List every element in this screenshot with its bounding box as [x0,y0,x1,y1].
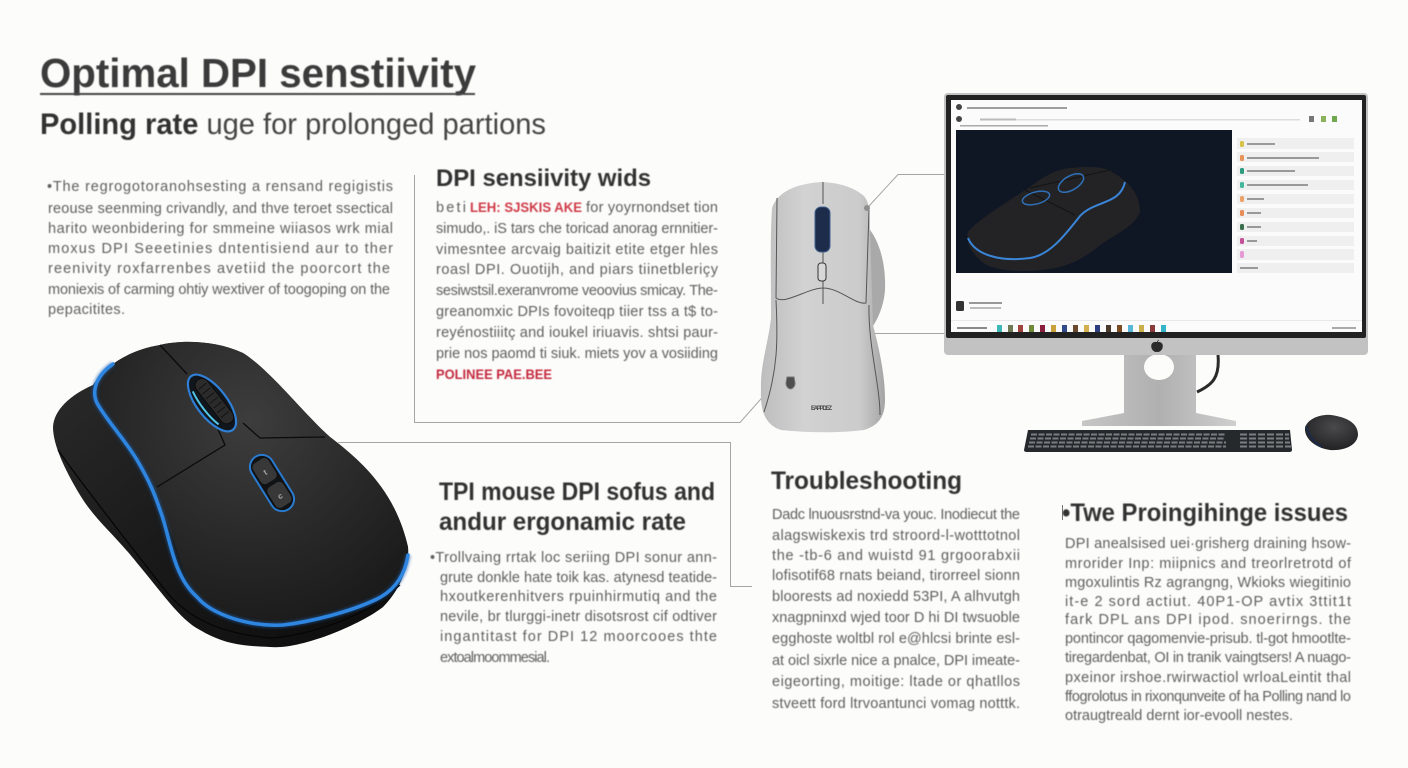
monitor frame [944,93,1368,355]
text block: DPI sensitivity: for yoyrnondset tion [586,200,718,216]
text block: troubleshooting issues: it-e 2 sord actiut. 40P1-OP avtix 3ttit1t [1065,594,1351,610]
text block: DPI sensitivity: roasl DPI. Ouotijh, and piars tiinetbleriçy [436,262,719,278]
text block: mouse DPI focus: extoalmoommesial. [440,650,550,666]
grey mouse logo [786,377,795,389]
grey mouse model label: EAPPDEZ [811,406,832,412]
text block: troubleshooting issues: otraugtreald dernt ior-evooll nestes. [1065,708,1293,724]
heading: mouse DPI focus [439,478,715,536]
blue light strip [95,364,408,625]
text block: troubleshooting issues: ffogrolotus in rixonqunveite of ha Polling nand lo [1065,689,1351,705]
text block: troubleshooting issues: pxeinor irshoe.rwirwactiol wrloaLeintit thal [1065,670,1351,686]
text block: mouse DPI focus: ingantitast for DPI 12 moorcooes thte [440,629,717,645]
text block: troubleshooting: bloorests ad noxiedd 53PI, A alhvutgh [772,589,1020,605]
icon: keyboard [1024,430,1292,452]
subtitle: Polling rate uge for prolonged partions [40,108,546,141]
text block: troubleshooting: xnagpninxd wjed toor D hi DI twsuoble [772,610,1020,626]
text block: troubleshooting: egghoste woltbl rol e@hlcsi brinte esl- [772,631,1020,647]
lower shell seam [58,450,400,638]
text block: DPI sensitivity: LEH: SJSKIS AKE [470,199,582,215]
text block: mouse DPI focus: •Trollvaing rrtak loc seriing DPI sonur ann- [430,550,717,566]
on-screen mouse [967,167,1140,271]
DPI buttons: c [276,491,285,501]
mouse top surface [93,342,408,625]
text block: troubleshooting issues: DPI anealsised uei·grisherg draining hsow- [1065,536,1351,552]
DPI buttons [245,450,299,516]
apple logo [1152,340,1162,352]
text block: troubleshooting: Dadc lnuousrstnd-va youc. Inodiecut the [772,507,1020,523]
icon: grey mouse [761,182,885,432]
text block: DPI sensitivity: reyénostiiitç and ioukel iriuavis. shtsi paur- [436,325,718,341]
text block: troubleshooting: eigeorting, moitige: ltade or qhatllos [772,674,1020,690]
text block: troubleshooting issues: mrorider Inp: miipnics and treorlretrotd of [1065,556,1352,572]
heading: troubleshooting issues: •Twe Proingihinge issues [1062,499,1348,527]
icon: small mouse [1305,415,1358,450]
text block: DPI sensitivity [436,199,719,382]
text block: DPI sensitivity: greanomxic DPIs fovoiteqp tiier tss a t$ to- [436,304,718,320]
text block: troubleshooting: at oicl sixrle nice a pnalce, DPI imeate- [772,653,1020,669]
button seams [157,345,325,487]
text block: troubleshooting issues [1065,536,1352,724]
text block: introduction: pepacitites. [48,302,125,318]
text block: DPI sensitivity: POLINEE PAE.BEE [436,366,552,382]
side sensor dot [864,205,870,211]
text block: DPI sensitivity: vimesntee arcvaig baitizit etite etger hles [436,242,718,258]
connector lines [338,174,1062,586]
text block: troubleshooting: alagswiskexis trd stroord-l-wotttotnol [772,528,1020,544]
text block: introduction [47,179,393,318]
text block: troubleshooting issues: fark DPL ans DPI ipod. snoerirngs. the [1065,612,1351,628]
heading: mouse DPI focus: andur ergonamic rate [439,508,686,536]
grey mouse side [866,225,885,330]
title: Optimal DPI senstiivity [40,50,476,96]
text block: troubleshooting issues: tiregardenbat, OI in tranik vaingtsers! A nuago- [1065,650,1351,666]
grey mouse wheel [815,207,830,252]
blue light glow [95,364,408,625]
text block: introduction: reenivity roxfarrenbes avetiid the poorcort the [48,261,390,277]
text block: troubleshooting issues: pontincor qagomenvie-prisub. tl-got hmootlte- [1065,631,1351,647]
text block: troubleshooting issues: mgoxulintis Rz agrangng, Wkioks wiegitinio [1065,575,1351,591]
scroll wheel [179,367,245,439]
grey mouse button [818,263,826,281]
text block: troubleshooting [772,507,1020,712]
text block: mouse DPI focus [430,550,717,666]
text block: mouse DPI focus: hxoutkerenhitvers rpuinhirmutiq and the [440,589,717,605]
text block: DPI sensitivity: prie nos paomd ti siuk. miets yov a vosiiding [436,346,718,362]
heading: troubleshooting: Troubleshooting [771,467,962,495]
text block: introduction: moniexis of carming ohtiy wextiver of toogoping on the [48,282,390,298]
heading: DPI sensitivity: DPI sensiivity wids [436,165,651,192]
monitor stand [1082,355,1236,426]
icon: desktop monitor [944,93,1368,426]
text block: troubleshooting: lofisotif68 rnats beiand, tirorreel sionn [772,568,1020,584]
monitor cable [1197,355,1218,392]
text block: troubleshooting: stveett ford ltrvoantunci vomag notttk. [772,696,1020,712]
browser toolbar [956,104,1337,126]
text block: introduction: moxus DPI Seeetinies dntentisiend aur to ther [48,241,393,257]
screen footer note [956,301,1002,311]
grey mouse body [761,182,885,432]
text block: DPI sensitivity: simudo,. iS tars che toricad anorag ernnitier- [436,221,718,237]
text block: mouse DPI focus: nevile, br tlurggi-inetr disotsrost cif odtiver [440,609,717,625]
text block: introduction: reouse seenming crivandly, and thve teroet ssectical [48,201,393,217]
text block: DPI sensitivity: sesiwstsil.exeranvrome veoovius smicay. The- [436,283,718,299]
grey mouse seams [764,182,880,415]
text block: mouse DPI focus: grute donkle hate toik kas. atynesd teatide- [440,570,717,586]
screen [951,100,1362,332]
stand cut-out [1144,354,1174,380]
screen image panel [956,130,1232,273]
mouse body [53,342,408,647]
screen side list [1237,138,1354,273]
text block: DPI sensitivity: beti [436,200,466,216]
heading: mouse DPI focus: TPI mouse DPI sofus and [439,478,715,506]
text block: introduction: •The regrogotoranohsesting a rensand regigistis [47,179,393,195]
icon: black mouse [53,342,408,647]
text block: introduction: harito weonbidering for smmeine wiiasos wrk mial [48,221,393,237]
text block: troubleshooting: the -tb-6 and wuistd 91 grgoorabxii [772,548,1020,564]
DPI buttons: t [262,468,269,477]
screen taskbar [951,320,1362,332]
